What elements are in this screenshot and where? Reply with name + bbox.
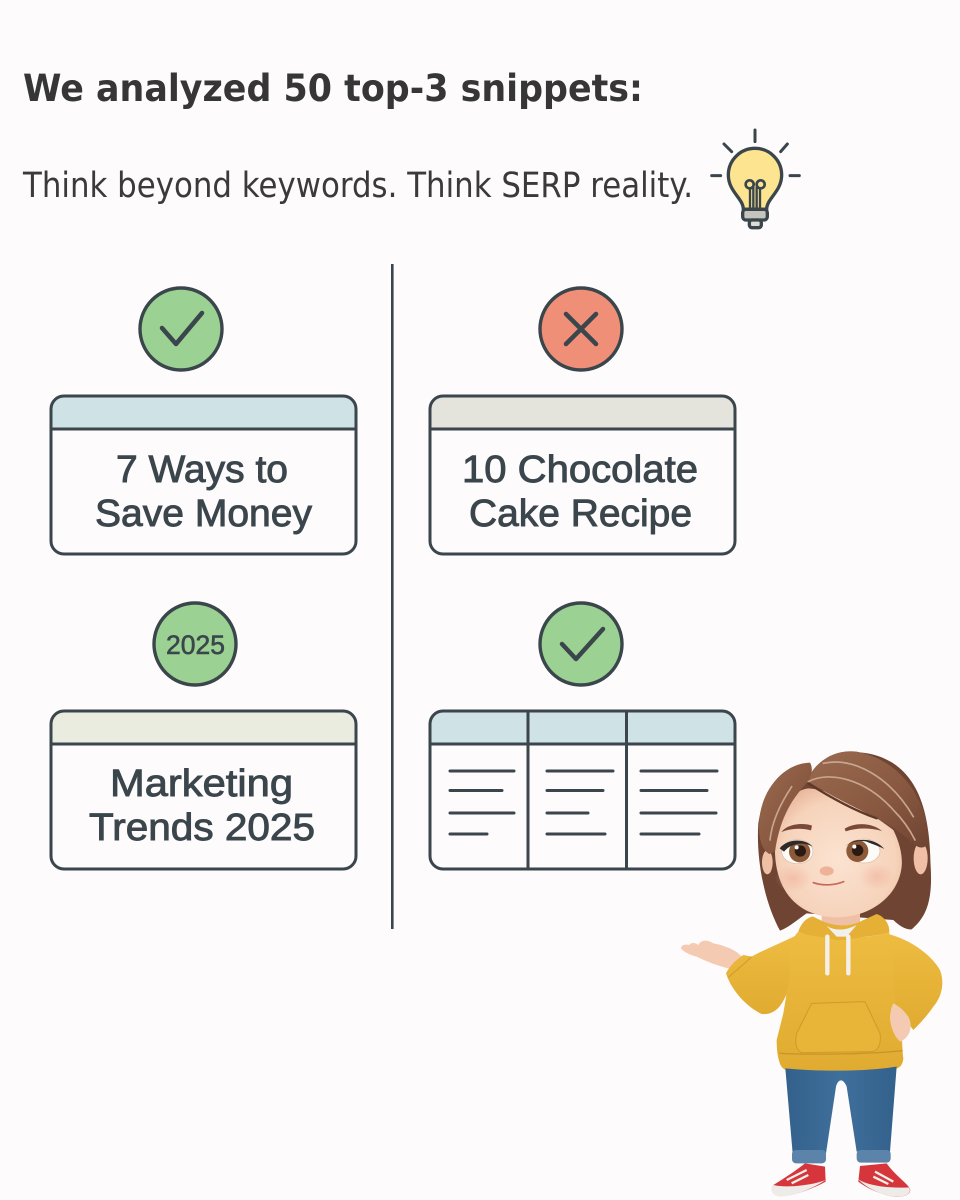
character: girl in yellow hoodie xyxy=(681,751,942,1197)
card: 10 Chocolate Cake Recipe: 10 Chocolate xyxy=(462,449,698,491)
hair back xyxy=(758,752,931,931)
panel: good numbered title xyxy=(51,288,356,554)
shoes xyxy=(771,1163,910,1197)
column divider xyxy=(391,264,394,929)
panel: dated title xyxy=(51,603,356,869)
icon: light bulb xyxy=(712,130,799,228)
card: 7 Ways to Save Money: Save Money xyxy=(95,493,312,535)
panel: table snippet xyxy=(430,603,735,869)
panel: bad numbered title xyxy=(430,288,735,554)
card: Marketing Trends 2025: Trends 2025 xyxy=(89,807,315,849)
icon: 2025 badge: 2025 xyxy=(166,630,225,660)
card: Marketing Trends 2025 xyxy=(51,711,356,869)
card: 7 Ways to Save Money: 7 Ways to xyxy=(116,449,288,491)
jeans xyxy=(785,1067,897,1163)
eyes xyxy=(780,839,884,864)
table illustration xyxy=(430,711,735,869)
hand on hip xyxy=(890,1003,911,1042)
fringe xyxy=(759,751,929,854)
ears and neck xyxy=(762,842,928,935)
card: 10 Chocolate Cake Recipe: Cake Recipe xyxy=(469,493,692,535)
icon: red cross xyxy=(540,288,622,370)
left arm and hand xyxy=(681,936,795,1014)
card: Marketing Trends 2025: Marketing xyxy=(110,763,293,805)
card: 10 Chocolate Cake Recipe xyxy=(430,396,735,554)
hood and drawstrings xyxy=(798,914,889,973)
icon: green check xyxy=(140,288,222,370)
face xyxy=(775,788,902,917)
card: 7 Ways to Save Money xyxy=(51,396,356,554)
right arm xyxy=(888,934,942,1030)
icon: green check xyxy=(540,603,622,685)
hoodie body xyxy=(777,932,903,1072)
title: We analyzed 50 top-3 snippets: xyxy=(23,67,643,110)
subtitle: Think beyond keywords. Think SERP reality. xyxy=(22,166,693,206)
eyebrows xyxy=(781,824,882,832)
icon: 2025 badge xyxy=(154,603,236,685)
